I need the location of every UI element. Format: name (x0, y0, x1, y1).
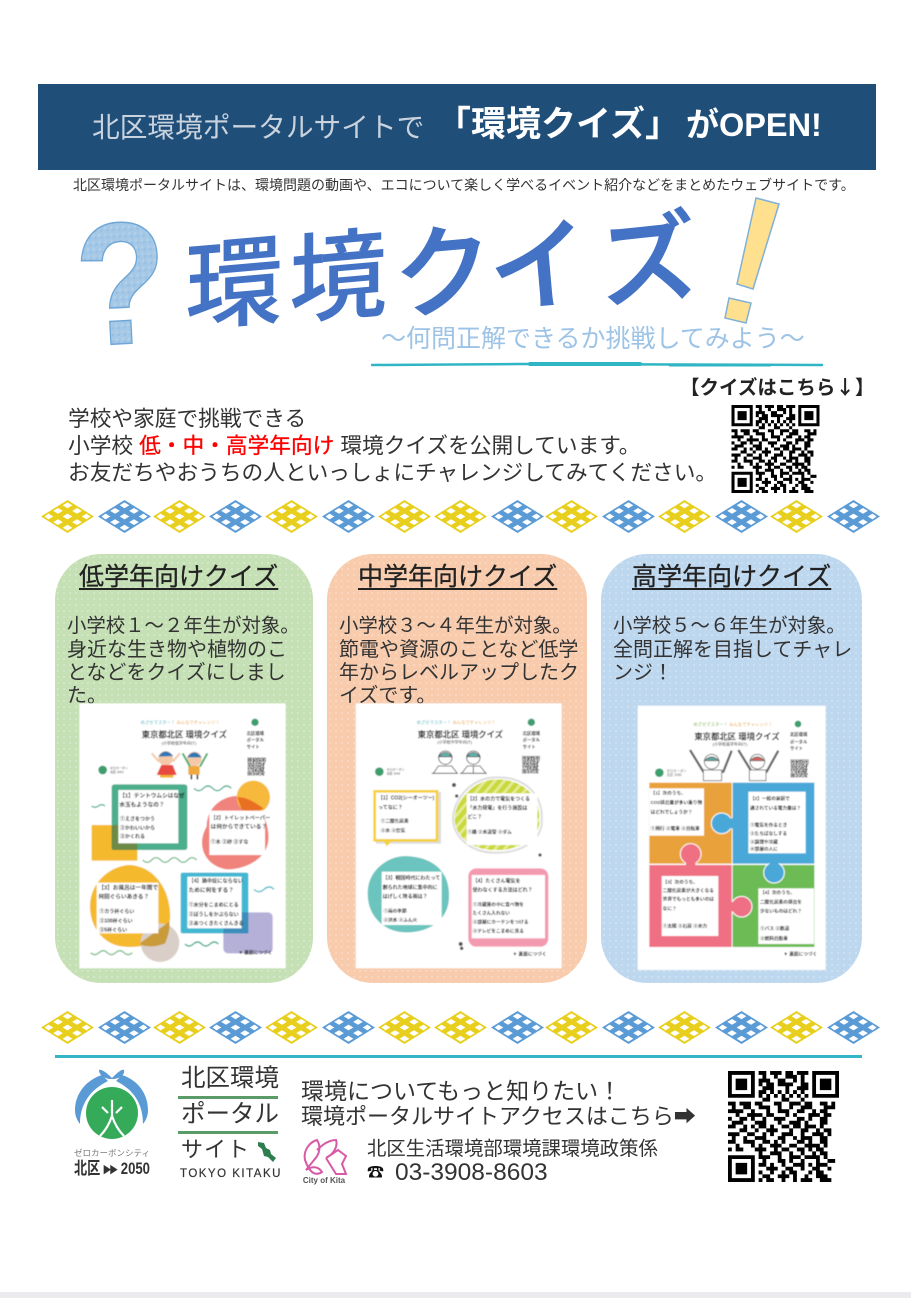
quiz thumbnail: upper grades: ゼロカーボン (667, 768, 687, 773)
quiz thumbnail: upper grades: なに？ (663, 905, 677, 911)
quiz thumbnail: upper grades: 少ないものはどれ？ (760, 908, 802, 915)
quiz thumbnail: lower grades: 北区 2050 (110, 769, 124, 774)
TOKYO KITAKU: TOKYO KITAKU (180, 1168, 282, 1180)
quiz thumbnail: lower grades: 北区環境 (247, 730, 265, 737)
quiz thumbnail: upper grades: めざせマスター！ みんなでチャレンジ！ (693, 721, 772, 728)
quiz thumbnail: upper grades: ③燃料自動車 (760, 935, 788, 942)
panel description: 全問正解を目指してチャレ (613, 639, 852, 661)
quiz thumbnail: upper grades: 【1】次のうち、 (651, 790, 686, 797)
big title: ク (389, 214, 499, 334)
quiz thumbnail: lower grades: ②かわいいから (120, 824, 155, 831)
quiz thumbnail: upper grades: ▼ 裏面につづく (783, 950, 817, 957)
quiz thumbnail: lower grades: ③かくれる (120, 833, 145, 840)
quiz thumbnail: lower grades: は何からできている？ (211, 822, 267, 830)
quiz thumbnail: middle grades: ①橋 ②水道管 ③ダム (467, 828, 512, 835)
quiz thumbnail: lower grades: 東京都北区 環境クイズ (142, 730, 228, 740)
panel description: 年からレベルアップしたク (339, 662, 579, 684)
quiz thumbnail: lower grades: ①えさをつかう (120, 816, 155, 823)
quiz thumbnail: middle grades: 北区 2050 (387, 770, 401, 775)
header banner (38, 84, 876, 170)
department name: 北区生活環境部環境課環境政策係 (367, 1138, 658, 1160)
quiz thumbnail: lower grades: ゼロカーボン (110, 765, 128, 770)
quiz thumbnail: middle grades (355, 702, 562, 969)
icon: telephone: ☎ (367, 1163, 384, 1182)
quiz thumbnail: upper grades: ①太陽 ②石炭 ③水力 (663, 922, 708, 929)
quiz thumbnail: middle grades: ②洪水 ③ふん火 (383, 917, 418, 924)
quiz thumbnail: middle grades: はげしく降る雨は？ (383, 893, 428, 900)
quiz thumbnail: lower grades: ▼ 裏面につづく (238, 949, 272, 956)
quiz thumbnail: middle grades: ①二酸化炭素 (381, 818, 409, 825)
quiz thumbnail: middle grades: 【3】戦国時代にわたって (383, 875, 440, 882)
big title: イ (484, 208, 594, 328)
quiz thumbnail: lower grades: ③5杯ぐらい (99, 927, 127, 934)
quiz QR label: 【クイズはこちら↓】 (680, 371, 874, 400)
quiz thumbnail: upper grades: 北区 2050 (667, 772, 682, 777)
panel description: 小学校５～６年生が対象。 (613, 615, 846, 637)
quiz thumbnail: middle grades: ってなに？ (378, 804, 403, 811)
QR code: portal site (728, 1071, 839, 1182)
quiz thumbnail: middle grades: ポータル (523, 737, 541, 744)
quiz thumbnail: upper grades: ③調理や冷蔵 (750, 838, 778, 845)
QR code: quiz (732, 405, 820, 493)
panel description: ンジ！ (613, 662, 673, 684)
quiz thumbnail: middle grades: サイト (523, 745, 536, 751)
quiz thumbnail: lower grades: ために何をする？ (189, 886, 234, 894)
logo: zero carbon city Kita 2050 (74, 1070, 150, 1178)
quiz thumbnail: middle grades: 東京都北区 環境クイズ (418, 730, 504, 740)
quiz thumbnail: upper grades: 二酸化炭素が大きくなる (663, 887, 714, 894)
logo: zero carbon city Kita 2050: ゼロカーボンシティ (74, 1148, 150, 1158)
big title (185, 201, 704, 344)
quiz thumbnail: middle grades: どこ？ (467, 813, 482, 820)
quiz thumbnail: lower grades: サイト (247, 745, 260, 751)
quiz thumbnail: lower grades: めざせマスター！ みんなでチャレンジ！ (141, 719, 220, 726)
footer message (301, 1078, 696, 1129)
panel description (339, 615, 579, 707)
quiz thumbnail: middle grades: 【4】たくさん電気を (473, 878, 520, 885)
quiz thumbnail: lower grades: ②ぼうしをかぶらない (189, 911, 239, 918)
portal word 2: ポータル (181, 1101, 279, 1128)
quiz thumbnail: middle grades: 北区環境 (523, 730, 541, 737)
quiz thumbnail: middle grades: 使わなくする方法はどれ？ (473, 887, 533, 894)
quiz thumbnail: middle grades: 「水力発電」を行う施設は (467, 804, 527, 811)
portal word 1: 北区環境 (181, 1065, 279, 1092)
quiz thumbnail: lower grades: 何回ぐらいあきる？ (98, 892, 149, 900)
quiz thumbnail: upper grades: ②たちばなしする (750, 830, 788, 837)
diamond pattern row top (41, 500, 880, 533)
panel description: 身近な生き物や植物のこ (67, 639, 287, 661)
header text: quiz open: 「環境クイズ」がOPEN! (436, 105, 822, 144)
quiz thumbnail: middle grades: ゼロカーボン (387, 766, 405, 771)
panel description: た。 (67, 685, 107, 707)
quiz thumbnail: middle grades: 創られた地球に集中的に (383, 884, 438, 891)
quiz thumbnail: middle grades: (小学校中学年向け) (437, 738, 473, 744)
quiz thumbnail: lower grades: (小学校低学年向け) (162, 739, 197, 745)
intro line 2: 小学校 低・中・高学年向け 環境クイズを公開しています。 (68, 433, 640, 458)
panel description (613, 615, 852, 684)
quiz thumbnail: upper grades: ①電気を作るとき (750, 822, 788, 829)
intro line 3: お友だちやおうちの人といっしょにチャレンジしてみてください。 (68, 460, 717, 485)
quiz thumbnail: lower grades: 【4】熱中症にならない (189, 877, 243, 885)
quiz thumbnail: upper grades: 東京都北区 環境クイズ (694, 732, 780, 742)
panel heading: 中学年向けクイズ (358, 563, 557, 591)
icon: Kita ward map (258, 1142, 276, 1162)
quiz thumbnail: upper grades: 世界でもっとも多いのは (663, 896, 714, 903)
panel: upper grades (601, 554, 862, 983)
quiz thumbnail: lower grades: ②100杯ぐらい (99, 917, 133, 924)
big title: 境 (289, 219, 387, 337)
quiz thumbnail: lower grades: ③あつくきたくさんきる (189, 920, 244, 927)
portal description: 北区環境ポータルサイトは、環境問題の動画や、エコについて楽しく学べるイベント紹介などをまとめたウェブサイトです。 (73, 177, 855, 193)
panel description: 小学校１～２年生が対象。 (67, 615, 300, 637)
quiz thumbnail: middle grades: ②部屋にカーテンをつける (473, 918, 529, 925)
quiz thumbnail: lower grades: 【2】トイレットペーパー (211, 815, 270, 822)
footer message line 1: 環境についてもっと知りたい！ (301, 1078, 621, 1104)
intro line 1: 学校や家庭で挑戦できる (68, 406, 306, 431)
quiz thumbnail: upper grades: ④部屋の人に (750, 846, 778, 853)
quiz thumbnail: upper grades: 二酸化炭素の排出を (760, 898, 802, 905)
bottom page edge (0, 1292, 911, 1298)
quiz thumbnail: upper grades: ①飛行 ②電車 ③自転車 (651, 825, 700, 832)
subtitle: ～何問正解できるか挑戦してみよう～ (381, 325, 805, 353)
logo: City of Kita (303, 1138, 348, 1185)
quiz thumbnail: middle grades: ①雨の季節 (383, 908, 407, 915)
quiz thumbnail: middle grades: ▼ 裏面につづく (513, 951, 547, 958)
quiz thumbnail: upper grades: (小学校高学年向け) (713, 740, 748, 746)
quiz thumbnail: upper grades: 【3】次のうち、 (663, 878, 698, 885)
quiz thumbnail: upper grades: 北区環境 (790, 731, 808, 738)
portal site logo (178, 1065, 282, 1180)
exclamation mark (724, 197, 780, 324)
quiz thumbnail: middle grades: たくさん入れない (473, 909, 510, 916)
quiz thumbnail: upper grades: サイト (790, 746, 803, 752)
quiz thumbnail: middle grades: 【2】水の力で電気をつくる (467, 795, 530, 802)
big title: ズ (593, 201, 704, 323)
quiz thumbnail: lower grades: ポータル (247, 737, 265, 744)
teal brush line (370, 362, 824, 366)
quiz thumbnail: middle grades: めざせマスター！ みんなでチャレンジ！ (417, 719, 496, 726)
quiz thumbnail: upper grades: CO2排出量が多い乗り物 (651, 799, 702, 806)
panel: middle grades (327, 554, 587, 983)
quiz thumbnail: upper grades: 【4】次のうち、 (760, 889, 795, 896)
quiz thumbnail: upper grades: はどれでしょうか？ (651, 808, 692, 815)
quiz thumbnail: upper grades: 通されている電力量は？ (750, 804, 801, 811)
panel description (67, 615, 300, 707)
quiz thumbnail: lower grades: 【3】お風呂は一年間で (98, 884, 158, 892)
panel description: 小学校３～４年生が対象。 (339, 615, 572, 637)
panel description: 節電や資源のことなど低学 (339, 639, 578, 661)
quiz thumbnail: middle grades: ②水 ③空気 (381, 827, 406, 834)
quiz thumbnail: upper grades: 【2】一般の家庭で (750, 795, 790, 802)
panel description: イズです。 (339, 685, 436, 707)
quiz thumbnail: upper grades (637, 705, 826, 970)
logo: City of Kita: City of Kita (303, 1176, 346, 1185)
quiz thumbnail: lower grades: ①木 ②砂 ③すな (211, 839, 248, 846)
quiz thumbnail: lower grades: ①水分をこまめにとる (189, 902, 239, 909)
quiz thumbnail: upper grades: ポータル (790, 738, 808, 745)
panel: lower grades (55, 554, 313, 983)
quiz thumbnail: lower grades: 【1】テントウムシはなぜ (119, 791, 185, 799)
panel heading: 高学年向けクイズ (632, 563, 831, 591)
quiz thumbnail: upper grades: ①バス ②鉄道 (760, 925, 790, 932)
big title: 環 (185, 226, 283, 344)
portal word 3: サイト (181, 1137, 250, 1162)
quiz thumbnail: middle grades: 【1】CO2(シーオーツー) (378, 795, 435, 802)
phone digits: 03-3908-8603 (395, 1159, 548, 1186)
quiz thumbnail: lower grades: 水玉もようなの？ (119, 800, 165, 808)
quiz thumbnail: lower grades (78, 702, 286, 969)
quiz thumbnail: middle grades: ①冷蔵庫の中に食べ物を (473, 901, 524, 908)
footer message line 2: 環境ポータルサイトアクセスはこちら➡ (301, 1104, 696, 1129)
panel description: となどをクイズにしまし (67, 662, 286, 684)
quiz thumbnail: lower grades: ①カラ杯ぐらい (99, 908, 134, 915)
header text: portal site: 北区環境ポータルサイトで (92, 112, 424, 143)
phone number (367, 1159, 548, 1186)
intro text (68, 406, 717, 485)
panel heading: 低学年向けクイズ (79, 563, 278, 591)
quiz thumbnail: middle grades: ③テレビをこまめに見る (473, 927, 524, 934)
teal line (55, 1055, 862, 1058)
